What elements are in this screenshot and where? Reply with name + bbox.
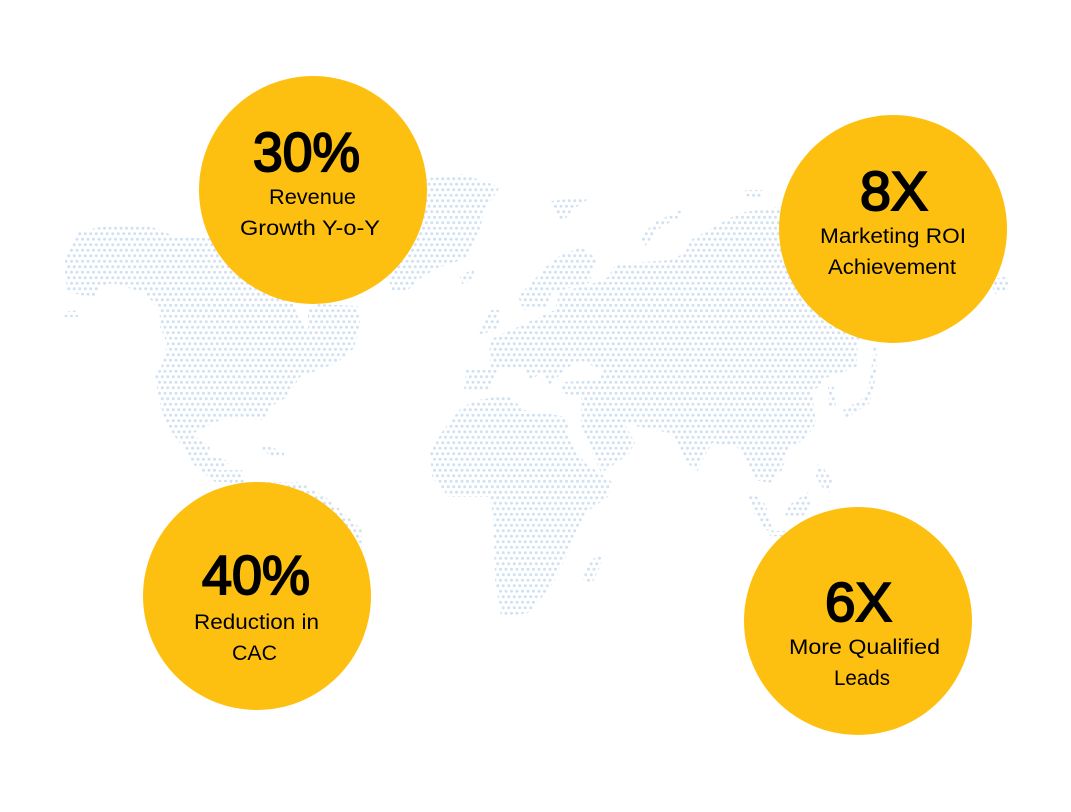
map: Greenland xyxy=(380,174,500,293)
map: Severnaya Zemlya xyxy=(745,190,763,198)
stat: 40% reduction in CAC xyxy=(143,482,371,710)
stat: 30% revenue growth xyxy=(199,76,427,304)
stat: 40% reduction in CAC: CAC xyxy=(232,642,277,665)
map: South America xyxy=(228,482,362,560)
map: Java xyxy=(770,531,800,537)
map: Sumatra xyxy=(745,493,773,532)
stat: 6X more qualified leads: More Qualified xyxy=(789,636,940,659)
map: Borneo xyxy=(785,492,812,518)
stat: 6X more qualified leads: Leads xyxy=(834,667,890,690)
map: Novaya Zemlya xyxy=(639,210,683,246)
map: Africa xyxy=(430,395,612,617)
stat: 30% revenue growth: Revenue xyxy=(269,186,356,209)
map: Iberia xyxy=(464,370,497,391)
stat: 8X marketing ROI: Achievement xyxy=(828,256,956,279)
map: Aleutian islands xyxy=(64,310,78,317)
map: Eurasia xyxy=(489,200,985,483)
stat: 40% reduction in CAC: 40% xyxy=(202,544,310,606)
stat: 6X more qualified leads: 6X xyxy=(825,571,892,633)
map: Japan xyxy=(843,345,877,419)
map: North America xyxy=(65,224,360,482)
map: United Kingdom xyxy=(476,310,499,335)
stat: 30% revenue growth: 30% xyxy=(253,121,360,183)
map: Korea xyxy=(828,387,836,407)
map: Iceland xyxy=(459,270,474,284)
stat: 30% revenue growth: Growth Y-o-Y xyxy=(240,217,380,240)
stat: 8X marketing ROI xyxy=(779,115,1007,343)
stat: 6X more qualified leads xyxy=(744,507,972,735)
map: Madagascar xyxy=(581,553,603,584)
map: Philippines xyxy=(816,462,832,492)
map: Far East tip xyxy=(990,276,1008,294)
stat: 8X marketing ROI: Marketing ROI xyxy=(820,225,966,248)
map: Scandinavia xyxy=(518,247,597,310)
stat: 40% reduction in CAC: Reduction in xyxy=(194,611,319,634)
map: Svalbard xyxy=(551,196,593,220)
stat: 8X marketing ROI: 8X xyxy=(860,160,928,222)
map: Caribbean xyxy=(260,447,284,458)
dotted world map xyxy=(64,174,1008,617)
